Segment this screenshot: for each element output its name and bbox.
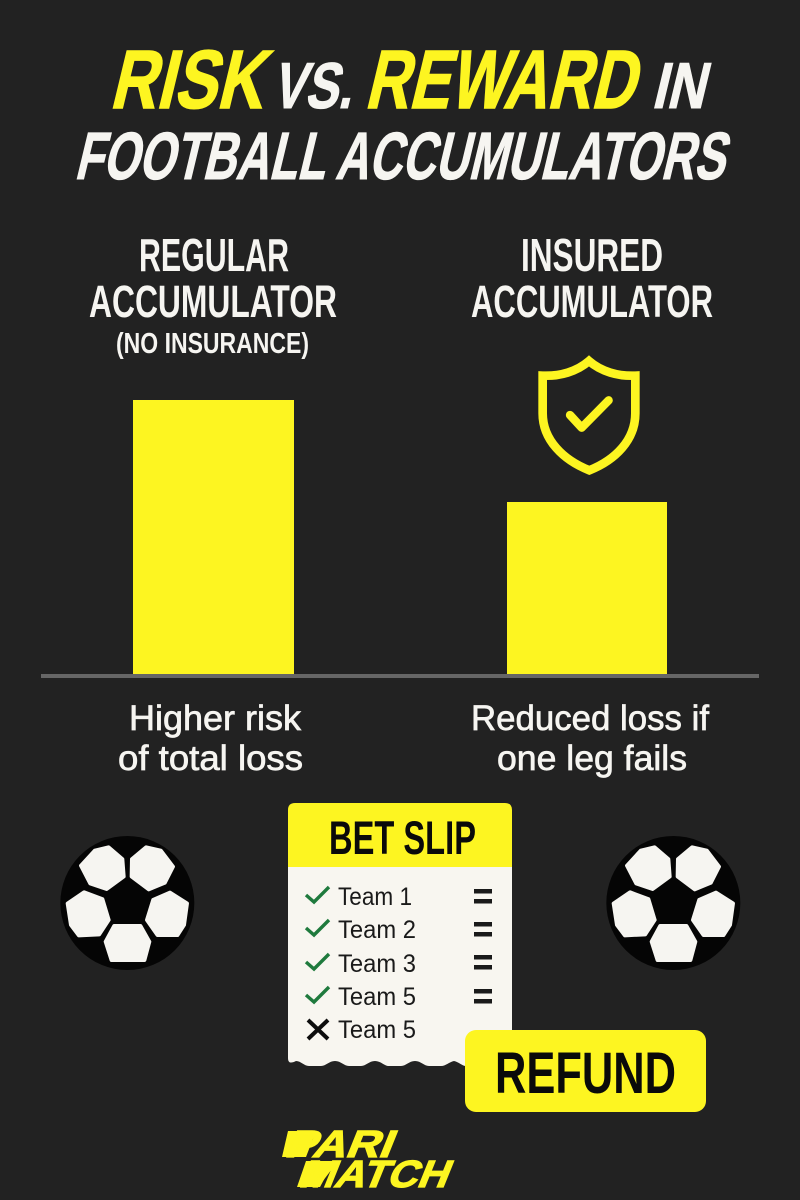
refund badge: REFUND	[495, 1041, 676, 1106]
logo: Parimatch: PARI	[281, 1123, 404, 1166]
refund badge	[465, 1030, 706, 1112]
slip title: BET SLIP	[329, 811, 476, 864]
check marks	[306, 887, 329, 1002]
caption: reduced loss	[471, 699, 709, 778]
heading: insured accumulator	[471, 229, 713, 327]
heading: regular accumulator	[89, 229, 337, 360]
title: RISK	[105, 33, 280, 126]
cross mark	[308, 1020, 328, 1039]
caption: reduced loss: Reduced loss if	[471, 699, 709, 738]
slip rows	[338, 883, 416, 1044]
heading: insured accumulator: INSURED	[521, 229, 663, 281]
logo: Parimatch: MATCH	[295, 1153, 460, 1196]
slip body	[288, 860, 512, 1066]
slip rows: Team 2	[338, 916, 416, 944]
slip header	[288, 803, 512, 867]
equals marks	[474, 889, 492, 1004]
heading: regular accumulator: ACCUMULATOR	[89, 276, 337, 327]
caption: higher risk: of total loss	[118, 739, 303, 778]
heading: regular accumulator: (NO INSURANCE)	[116, 328, 309, 360]
slip rows: Team 1	[338, 883, 412, 911]
bet slip	[288, 803, 512, 1066]
title	[70, 33, 738, 194]
caption: higher risk	[118, 699, 303, 778]
icon: left football	[60, 836, 194, 970]
title: REWARD	[360, 33, 652, 126]
caption: reduced loss: one leg fails	[497, 739, 687, 778]
title: IN	[648, 49, 718, 122]
logo: Parimatch	[281, 1123, 460, 1196]
bar: regular accumulator	[133, 400, 294, 675]
title: VS.	[268, 49, 365, 122]
icon: right football	[606, 836, 740, 970]
icon: shield with check	[543, 361, 635, 470]
slip rows: Team 3	[338, 950, 416, 978]
slip rows: Team 5	[338, 1016, 416, 1044]
heading: regular accumulator: REGULAR	[139, 229, 289, 281]
caption: higher risk: Higher risk	[129, 699, 302, 738]
slip rows: Team 5	[338, 983, 416, 1011]
bar: insured accumulator	[507, 502, 667, 675]
